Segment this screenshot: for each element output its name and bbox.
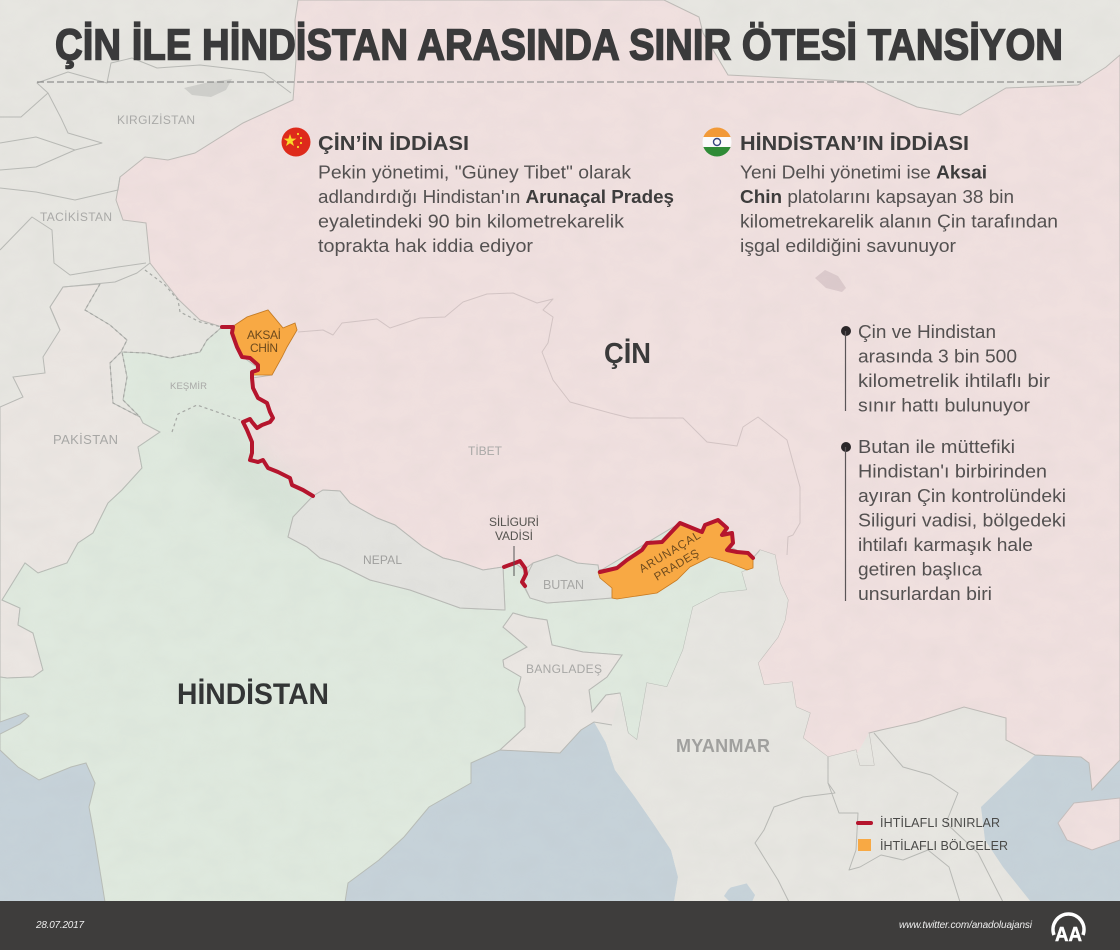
country labels: TACİKİSTAN <box>40 210 112 224</box>
disputed border: Siliguri <box>504 561 526 586</box>
footer bar <box>0 901 1120 950</box>
icon: China flag <box>282 128 310 156</box>
callout: Siliguri Vadisi: SİLİGURİ <box>489 515 539 529</box>
legend <box>856 816 1008 853</box>
disputed border: Ladakh to Uttarakhand <box>222 327 313 496</box>
text block: işgal edildiğini savunuyor <box>740 236 956 256</box>
disputed region: Aksai Chin: AKSAİ <box>247 328 281 342</box>
sea: South China Sea <box>981 755 1120 902</box>
disputed region: Arunachal Pradesh: PRADEŞ <box>652 547 702 584</box>
panel: India's claim <box>702 127 1058 256</box>
sea: Arabian Sea <box>0 750 105 902</box>
country: Nepal <box>288 490 505 610</box>
text block: eyaletindeki 90 bin kilometrekarelik <box>318 212 625 232</box>
callout: Siliguri valley: Hindistan'ı birbirinden <box>858 462 1047 482</box>
lake: Qinghai <box>815 270 846 292</box>
icon: Anadolu Agency logo <box>1053 914 1084 946</box>
callout: Siliguri valley: ihtilafı karmaşık hale <box>858 535 1033 555</box>
callout: border length: arasında 3 bin 500 <box>858 346 1017 366</box>
text block: kilometrekarelik alanın Çin tarafından <box>740 212 1058 232</box>
text block: Chin platolarını kapsayan 38 bin <box>740 187 1014 207</box>
country: Bangladesh <box>500 613 628 753</box>
label: Hindistan: HİNDİSTAN <box>177 678 329 711</box>
callout: border length: kilometrelik ihtilaflı bir <box>858 371 1050 391</box>
country: Pakistan <box>0 284 160 678</box>
heading: ÇİN’İN İDDİASI <box>318 132 469 155</box>
heading: HİNDİSTAN’IN İDDİASI <box>740 132 969 155</box>
country labels: BUTAN <box>543 578 584 592</box>
country labels: NEPAL <box>363 553 402 567</box>
text block: Yeni Delhi yönetimi ise Aksai <box>740 162 987 182</box>
callout: Siliguri valley: Butan ile müttefiki <box>858 437 1015 457</box>
country labels <box>40 113 770 756</box>
disputed region: Aksai Chin <box>232 310 297 375</box>
legend: İHTİLAFLI SINIRLAR <box>880 816 1000 830</box>
source url: www.twitter.com/anadoluajansi <box>899 920 1033 931</box>
icon: Anadolu Agency logo: AA <box>1055 924 1082 946</box>
disputed border: Arunachal <box>600 520 753 572</box>
lake: Issyk-Kul <box>184 79 232 97</box>
legend: İHTİLAFLI BÖLGELER <box>880 839 1008 853</box>
callout: Siliguri valley <box>841 437 1066 604</box>
callout: Siliguri valley: getiren başlıca <box>858 560 983 580</box>
callout: border length: sınır hattı bulunuyor <box>858 396 1030 416</box>
callout: border length <box>841 322 1050 416</box>
callout: Siliguri Vadisi <box>489 515 539 576</box>
callout: border length: Çin ve Hindistan <box>858 322 996 342</box>
disputed region: Arunachal Pradesh <box>598 520 753 599</box>
disputed region: Aksai Chin: CHİN <box>250 341 278 355</box>
shading: Himalayan foothills <box>190 420 310 540</box>
callout: Siliguri Vadisi: VADİSİ <box>495 529 533 543</box>
country labels: PAKİSTAN <box>53 432 118 447</box>
country labels: TİBET <box>468 444 503 458</box>
internal boundaries of neighbouring countries <box>0 58 291 117</box>
callout: Siliguri valley: unsurlardan biri <box>858 584 992 604</box>
sea: Bay of Bengal <box>345 722 678 902</box>
callout: Siliguri valley: ayıran Çin kontrolündeki <box>858 486 1066 506</box>
text block: Pekin yönetimi, "Güney Tibet" olarak <box>318 162 632 182</box>
date: 28.07.2017 <box>35 920 84 931</box>
country: China <box>116 0 1120 790</box>
icon: India flag <box>702 127 732 158</box>
country labels: KEŞMİR <box>170 381 207 392</box>
sea: Gulf of Kutch <box>0 713 29 734</box>
text block <box>740 162 1058 256</box>
sea: Gulf of Martaban <box>724 877 755 902</box>
country labels: KIRGIZİSTAN <box>117 113 195 127</box>
island: Hainan <box>1058 798 1120 850</box>
country: India <box>0 327 753 902</box>
panel: China's claim <box>282 128 674 256</box>
country: Bhutan <box>523 555 612 603</box>
Tibet provincial boundary <box>298 293 800 555</box>
label: Çin: ÇİN <box>604 338 651 370</box>
disputed region: Arunachal Pradesh: ARUNAÇAL <box>637 529 703 576</box>
country: Myanmar and east <box>606 550 874 902</box>
text block: adlandırdığı Hindistan'ın Arunaçal Pradeş <box>318 187 674 207</box>
country labels: BANGLADEŞ <box>526 662 602 676</box>
text block: toprakta hak iddia ediyor <box>318 236 533 256</box>
callout: Siliguri valley: Siliguri vadisi, bölgedeki <box>858 510 1066 530</box>
country labels: MYANMAR <box>676 736 770 756</box>
text block <box>318 162 674 256</box>
